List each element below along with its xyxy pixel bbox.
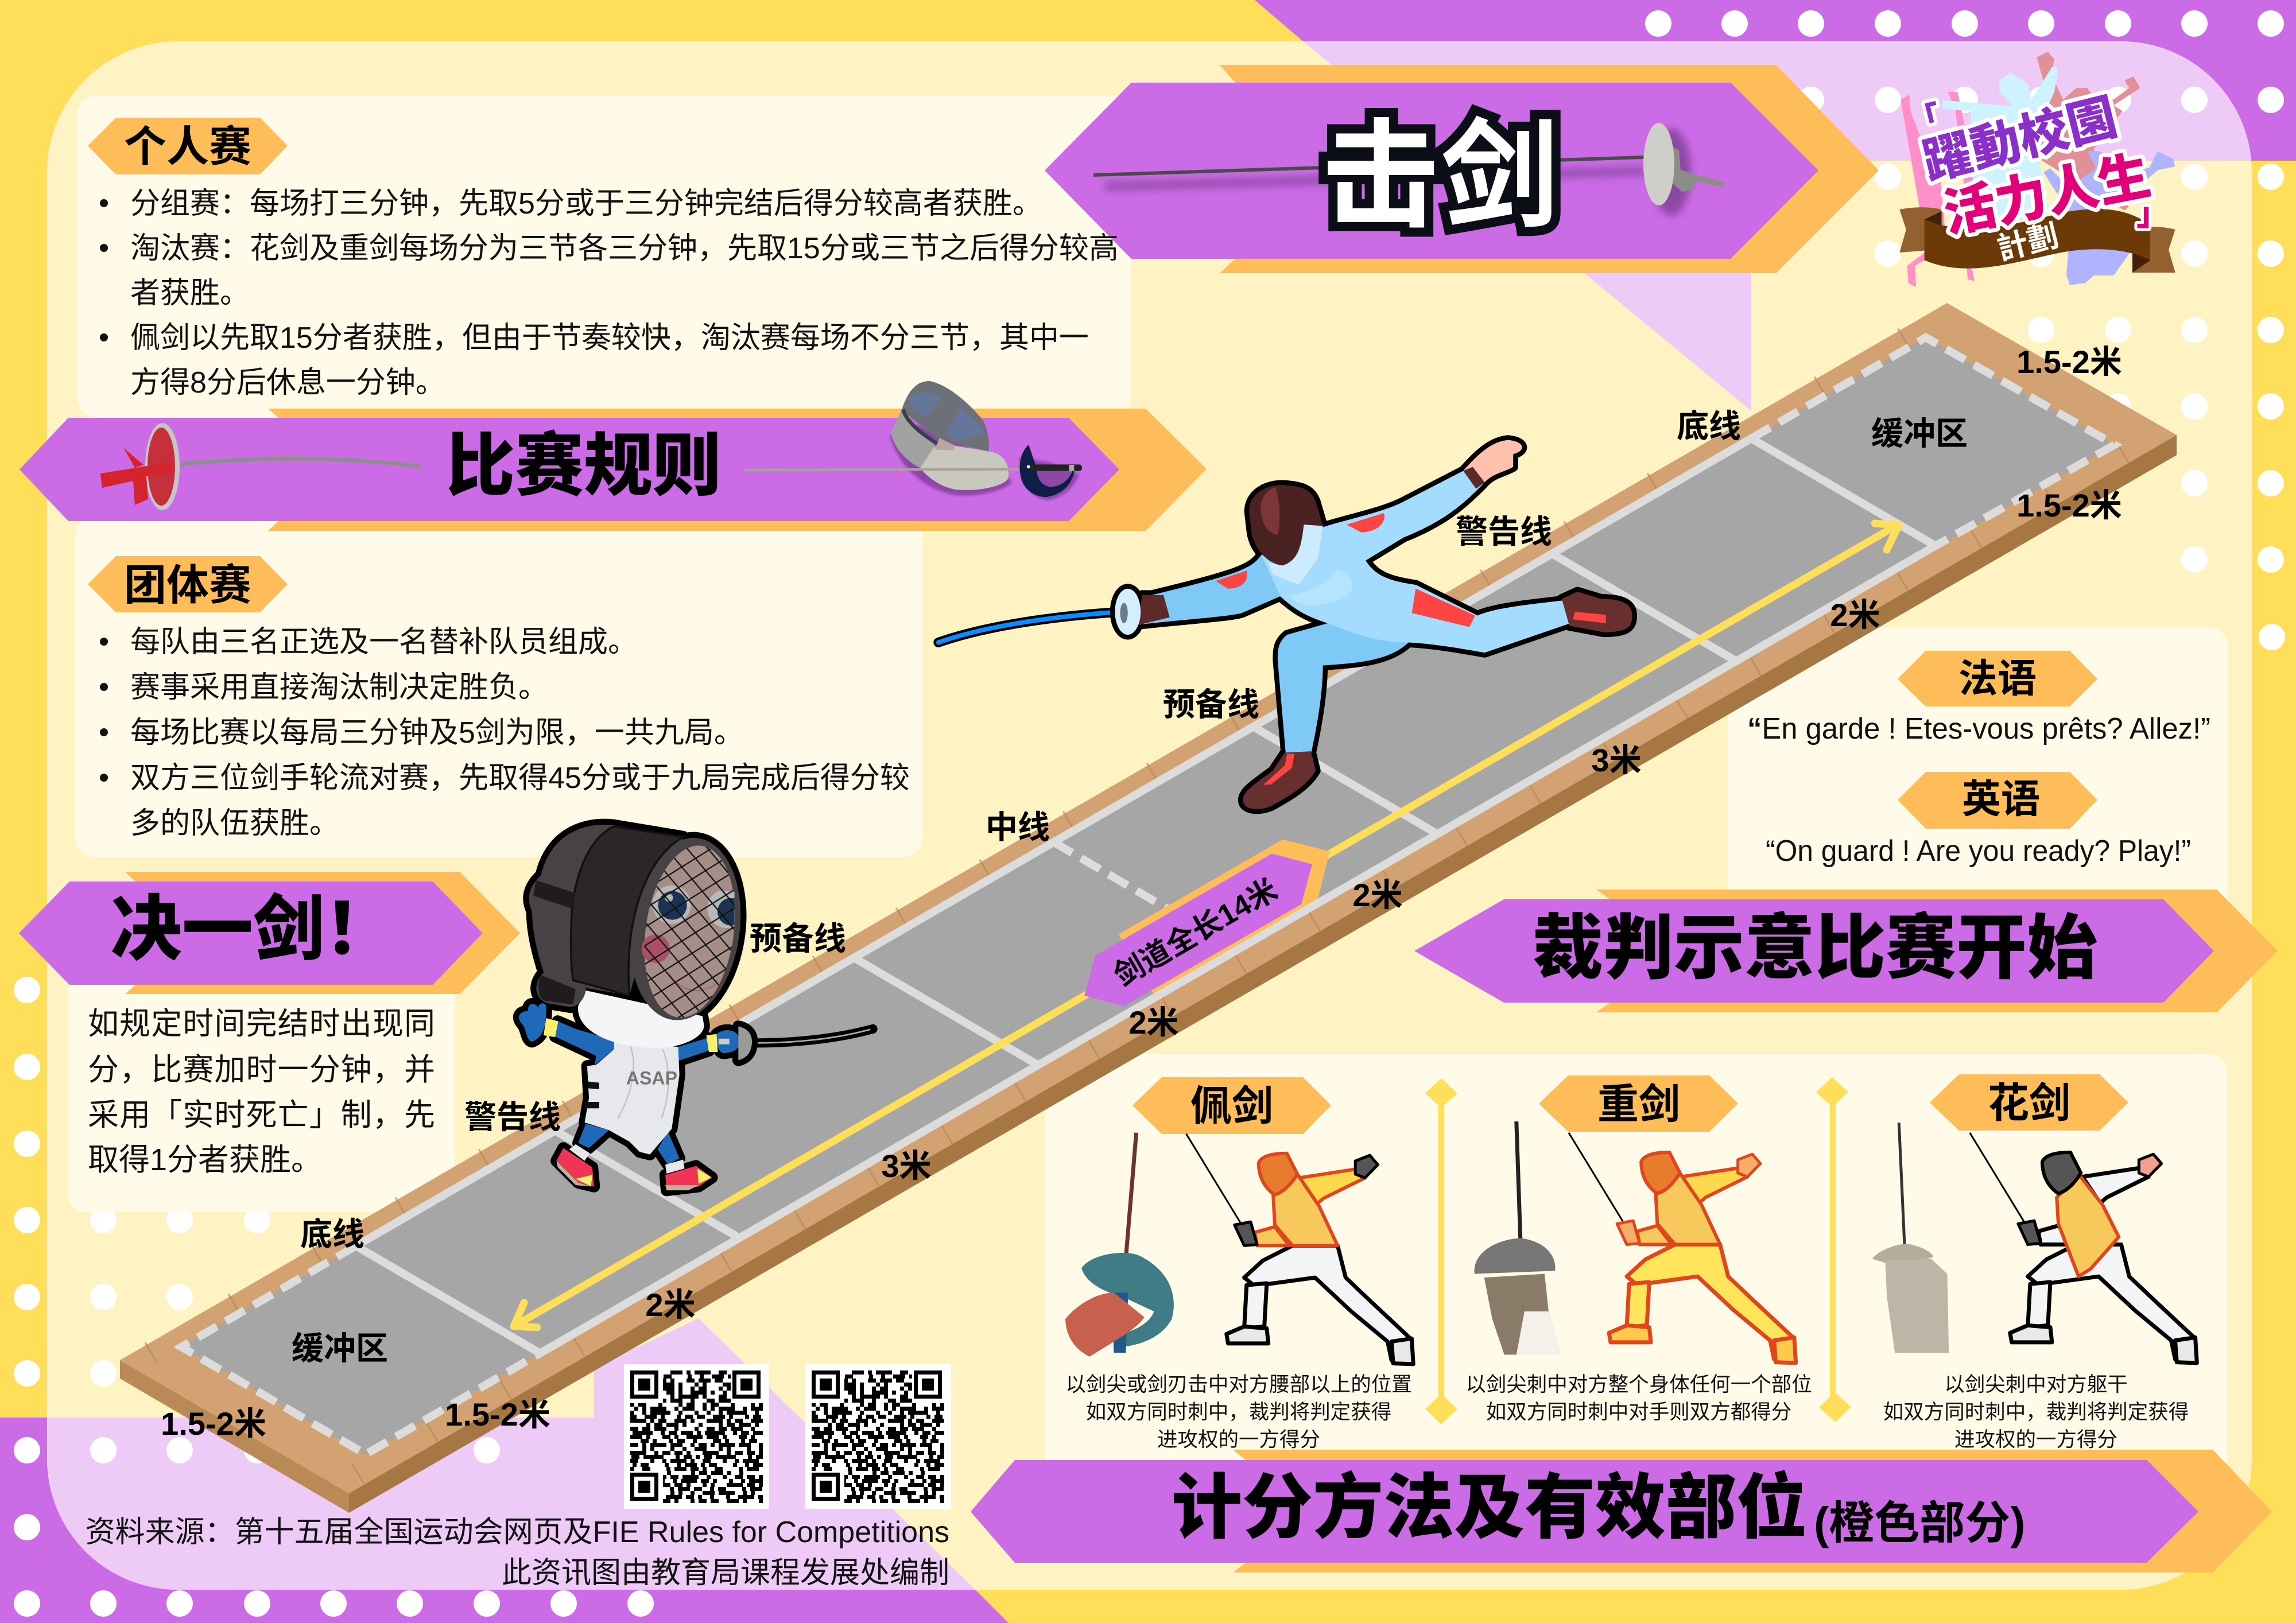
piste labels: 警告线 [464, 1099, 561, 1135]
text: epee scoring: 以剑尖刺中对方整个身体任何一个部位 [1465, 1373, 1812, 1396]
piste labels: 2米 [1128, 1004, 1179, 1040]
text: team event rules: 双方三位剑手轮流对赛，先取得45分或于九局完成后得分较 [130, 762, 910, 795]
figure: sabre target area [1186, 1134, 1413, 1364]
text: source credit: 此资讯图由教育局课程发展处编制 [502, 1556, 949, 1590]
label: sabre [1133, 1077, 1331, 1134]
text: epee scoring [1465, 1373, 1812, 1423]
text: individual event rules: 方得8分后休息一分钟。 [130, 366, 445, 399]
text: source credit: 资料来源：第十五届全国运动会网页及FIE Rules for Competitions [86, 1516, 949, 1549]
piste labels: 底线 [300, 1216, 364, 1252]
text: team event rules [100, 626, 910, 840]
label: French: 法语 [1958, 657, 2037, 701]
panel: individual event card [77, 96, 1131, 417]
piste labels: 1.5-2米 [161, 1405, 266, 1442]
piste labels: 1.5-2米 [445, 1396, 550, 1432]
piste labels: 底线 [1677, 408, 1741, 444]
piste labels: 1.5-2米 [2016, 487, 2122, 523]
title text: 剑 [1441, 111, 1558, 242]
piste labels: 2米 [1352, 877, 1403, 913]
piste labels: 缓冲区 [1871, 416, 1968, 452]
label: individual event [88, 118, 288, 174]
figure: foil target area [1970, 1133, 2197, 1363]
label: English [1898, 772, 2097, 829]
title text: 击 [1322, 111, 1440, 242]
text: team event rules: 每场比赛以每局三分钟及5剑为限，一共九局。 [130, 716, 744, 750]
illustration: chibi fencer [519, 825, 873, 1190]
fencing piste [120, 303, 2177, 1513]
text: French command: “En garde ! Etes-vous prêts? Allez!” [1747, 712, 2210, 746]
piste labels: 2米 [645, 1287, 696, 1323]
text: foil scoring: 以剑尖刺中对方躯干 [1944, 1373, 2128, 1396]
label: sabre: 佩剑 [1190, 1084, 1273, 1129]
piste labels: 3米 [881, 1148, 932, 1184]
banner: referee start [1414, 890, 2278, 1012]
text: foil scoring [1883, 1373, 2189, 1451]
text: sabre scoring: 如双方同时刺中，裁判将判定获得 [1086, 1400, 1391, 1423]
label: epee: 重剑 [1597, 1082, 1680, 1128]
panel: sudden death card [68, 976, 455, 1212]
logo: ribbon [1899, 207, 2175, 273]
callout: piste length 14 m: 剑道全长14米 [1108, 873, 1283, 993]
panel: team event card [75, 517, 922, 857]
label: team event [88, 556, 288, 612]
label: foil [1930, 1074, 2128, 1131]
text: sudden death rule: 采用「实时死亡」制，先 [88, 1098, 435, 1132]
label: individual event: 个人赛 [124, 123, 251, 170]
text: team event rules: 多的队伍获胜。 [130, 807, 339, 840]
icon: red foil [100, 423, 421, 510]
text: foil scoring: 如双方同时刺中，裁判将判定获得 [1883, 1400, 2189, 1423]
title text [1322, 111, 1558, 242]
illustration: lunging fencer [938, 440, 1632, 809]
text: English command: “On guard ! Are you ready? Play!” [1766, 834, 2191, 868]
text: individual event rules: 者获胜。 [130, 277, 250, 310]
label: team event: 团体赛 [124, 561, 251, 609]
illustration: chibi fencer: ASAP [626, 1068, 677, 1089]
icon: epee photo [1475, 1121, 1561, 1355]
piste labels: 警告线 [1456, 514, 1552, 550]
text: sabre scoring: 以剑尖或剑刃击中对方腰部以上的位置 [1065, 1373, 1412, 1396]
piste labels: 缓冲区 [292, 1330, 388, 1366]
logo: opening bracket: 「 [1905, 99, 1945, 142]
banner: scoring: 计分方法及有效部位 [1172, 1469, 1807, 1547]
banner: sudden death: 决一剑！ [111, 890, 395, 969]
text: sabre scoring: 进攻权的一方得分 [1157, 1428, 1320, 1451]
label: foil: 花剑 [1988, 1081, 2070, 1127]
weapons and scoring figures [1065, 1121, 2197, 1364]
logo: slogan line one: 躍動校園 [1917, 90, 2122, 191]
logo: jumping people [1901, 52, 2175, 287]
logo [1899, 52, 2175, 287]
piste labels: 2米 [1830, 597, 1880, 633]
piste labels: 3米 [1591, 742, 1642, 778]
icon: foil photo [1872, 1123, 1949, 1353]
label: French [1898, 651, 2097, 706]
figure: epee target area [1569, 1133, 1796, 1363]
QR code two [805, 1364, 951, 1509]
text: individual event rules: 佩剑以先取15分者获胜，但由于节奏较快，淘汰赛每场不分三节，其中一 [130, 321, 1089, 355]
banner: sudden death [19, 872, 520, 994]
title text: 比赛规则 [446, 428, 722, 504]
text: individual event rules [100, 187, 1119, 399]
text: sudden death rule: 取得1分者获胜。 [88, 1143, 322, 1177]
logo: slogan line two: 活力人生 [1939, 147, 2155, 243]
text: epee scoring: 如双方同时刺中对手则双方都得分 [1486, 1400, 1791, 1423]
icon: sabre photo [1065, 1133, 1174, 1357]
background: purple bottom left [0, 1418, 1009, 1623]
arrow: piste length [514, 523, 1899, 1327]
banner: scoring [971, 1450, 2272, 1572]
logo: closing bracket: 」 [2136, 195, 2170, 232]
divider one [1425, 1078, 1457, 1424]
text: team event rules: 赛事采用直接淘汰制决定胜负。 [130, 671, 548, 704]
text: sabre scoring [1065, 1373, 1412, 1451]
label: English: 英语 [1962, 778, 2040, 821]
text: foil scoring: 进攻权的一方得分 [1954, 1428, 2117, 1451]
piste labels: 预备线 [750, 921, 846, 957]
divider two [1816, 1077, 1851, 1422]
text: individual event rules: 淘汰赛：花剑及重剑每场分为三节各三分钟，先取15分或三节之后得分较高 [130, 232, 1119, 265]
panel: referee commands card [1728, 627, 2228, 926]
text: individual event rules: 分组赛：每场打三分钟，先取5分或于三分钟完结后得分较高者获胜。 [130, 187, 1042, 220]
piste labels [161, 344, 2122, 1442]
banner: scoring: (橙色部分) [1814, 1497, 2026, 1548]
piste labels: 预备线 [1163, 686, 1259, 723]
banner: rules [20, 381, 1207, 531]
piste labels: 1.5-2米 [2016, 344, 2122, 380]
QR code one [624, 1364, 769, 1509]
piste labels: 中线 [986, 809, 1050, 845]
background: purple top right [1255, 0, 2296, 161]
icon: mask and sabre [744, 381, 1082, 500]
text: sudden death rule: 分，比赛加时一分钟，并 [88, 1053, 435, 1087]
callout: piste length 14 m [1084, 840, 1330, 1006]
text: sudden death rule: 如规定时间完结时出现同 [88, 1007, 435, 1041]
label: epee [1539, 1075, 1738, 1132]
text: source credit [86, 1516, 949, 1590]
logo: plan label: 計劃 [1994, 218, 2062, 267]
banner: main title [1045, 65, 1879, 273]
text: team event rules: 每队由三名正选及一名替补队员组成。 [130, 626, 638, 659]
icon: epee in title [1093, 123, 1726, 216]
panel: weapons scoring card [1045, 1054, 2227, 1542]
text: sudden death rule [88, 1007, 435, 1177]
banner: referee start: 裁判示意比赛开始 [1533, 909, 2097, 988]
